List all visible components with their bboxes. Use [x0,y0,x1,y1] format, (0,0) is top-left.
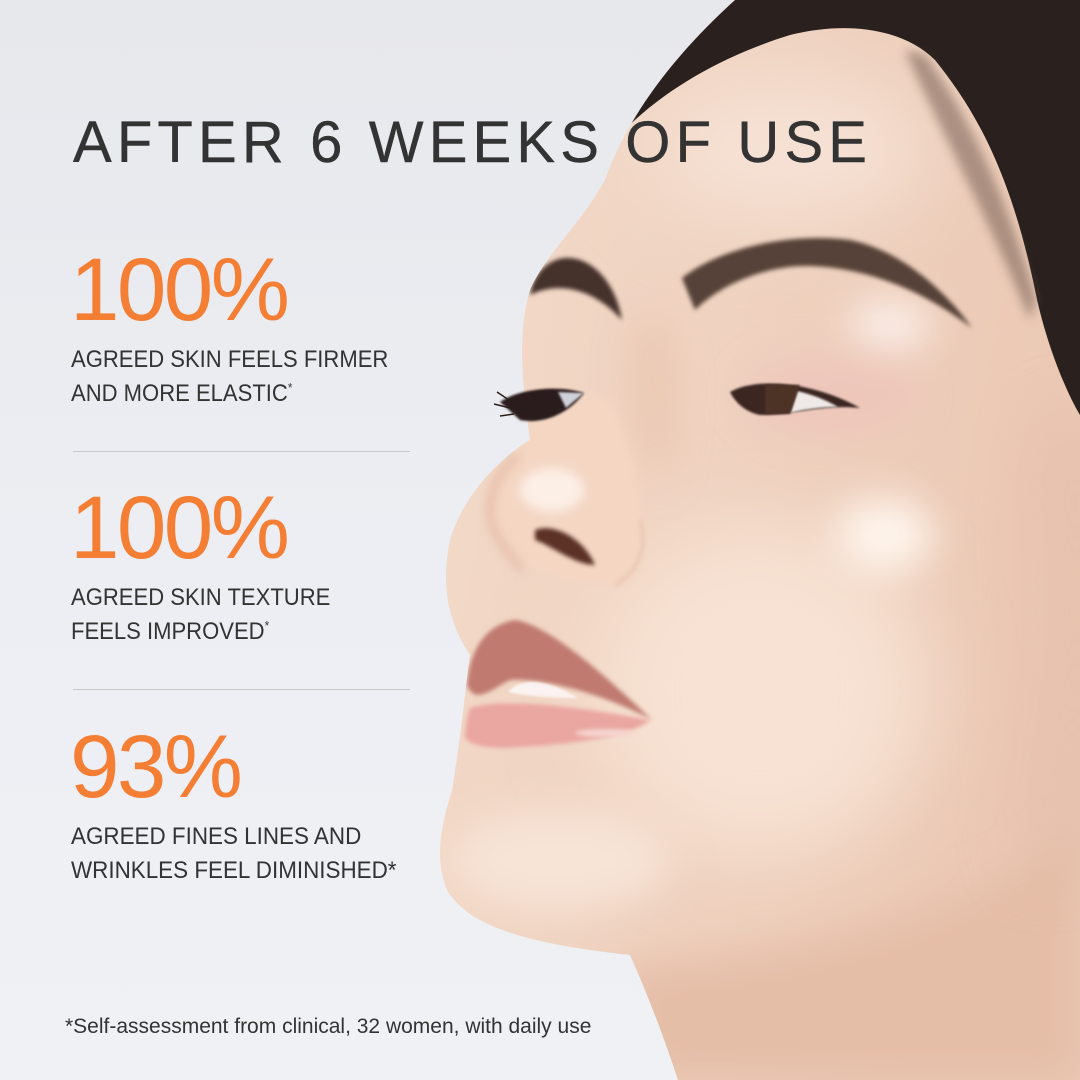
stat 2 [70,477,330,645]
hair [615,0,1080,415]
stat 2 value: 100% [70,477,287,577]
stat 1 text [71,346,388,407]
stat 3 text [71,823,397,884]
stat 3 value: 93% [70,716,240,816]
stat 3 [70,716,397,884]
stat 1 text: AND MORE ELASTIC* [71,380,292,407]
photo: woman's face in profile [440,0,1080,1080]
left eye [494,389,584,421]
stat 3 text: AGREED FINES LINES AND [71,823,361,850]
lips [467,620,652,720]
nose [632,336,671,442]
footnote: *Self-assessment from clinical, 32 women, with daily use [65,1015,591,1038]
brows [530,258,622,320]
stat 1 value: 100% [70,239,287,339]
stat 1 [70,239,388,407]
stat 2 text: FEELS IMPROVED* [71,618,269,645]
title: AFTER 6 WEEKS OF USE [73,110,872,175]
stat 2 text: AGREED SKIN TEXTURE [71,584,330,611]
neck shadow [633,863,1076,1080]
right eye [730,383,860,415]
stat 3 text: WRINKLES FEEL DIMINISHED* [71,857,397,884]
stat 2 text [71,584,330,645]
stat 1 text: AGREED SKIN FEELS FIRMER [71,346,388,373]
